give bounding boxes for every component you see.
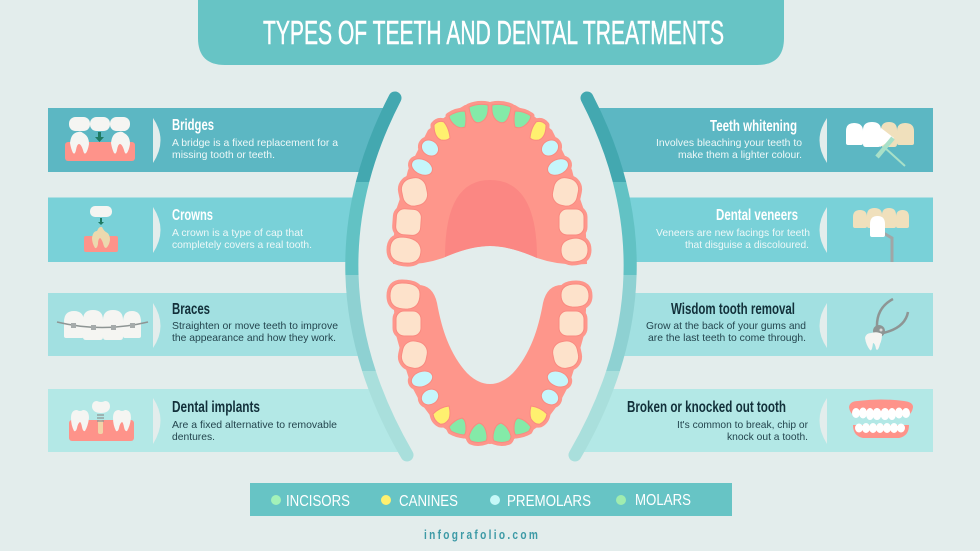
panel: dental veneers: [630, 198, 933, 262]
right arc: [575, 98, 630, 455]
footer website: infografolio.com: [424, 528, 538, 542]
panel: teeth whitening: [582, 108, 933, 172]
text block: It's common to break, chip or: [677, 419, 808, 431]
upper right tooth halo: [492, 104, 588, 262]
text block: [172, 320, 338, 344]
text block: [656, 137, 802, 161]
lower right tooth halo: [493, 284, 589, 442]
icon: braces: [57, 310, 148, 340]
text block: Straighten or move teeth to improve: [172, 320, 338, 332]
text block: the appearance and how they work.: [172, 332, 336, 344]
text block: knock out a tooth.: [727, 431, 808, 443]
text block: [677, 419, 808, 443]
panel: broken or knocked out tooth: [578, 389, 933, 452]
heading: Dental veneers: [716, 207, 798, 224]
heading: Wisdom tooth removal: [671, 301, 795, 318]
legend: molars: [616, 492, 691, 509]
text block: Veneers are new facings for teeth: [656, 227, 810, 239]
text block: missing tooth or teeth.: [172, 149, 275, 161]
text block: [646, 320, 806, 344]
text block: [172, 227, 312, 251]
text block: dentures.: [172, 431, 215, 443]
heading: Braces: [172, 301, 210, 318]
text block: [172, 419, 337, 443]
text block: [172, 137, 338, 161]
icon: whitening: [846, 122, 914, 166]
title banner: [198, 0, 784, 65]
text block: are the last teeth to come through.: [648, 332, 806, 344]
text block: [656, 227, 810, 251]
lower left tooth halo: [390, 283, 487, 442]
palate: [445, 180, 537, 258]
heading: Dental implants: [172, 399, 260, 416]
heading: Broken or knocked out tooth: [627, 399, 786, 416]
text block: A bridge is a fixed replacement for a: [172, 137, 338, 149]
panel: braces: [48, 293, 358, 356]
legend: incisors: [271, 493, 350, 510]
panel: crowns: [48, 198, 352, 262]
text block: Involves bleaching your teeth to: [656, 137, 802, 149]
text block: completely covers a real tooth.: [172, 239, 312, 251]
text block: that disguise a discoloured.: [685, 239, 809, 251]
lower teeth arch: [390, 283, 589, 444]
icon: bridge: [65, 117, 135, 161]
legend: canines: CANINES: [399, 493, 458, 510]
heading: Crowns: [172, 207, 213, 224]
upper gum: [393, 102, 587, 264]
lower gum: [394, 285, 586, 444]
lower left teeth: [390, 283, 487, 442]
legend: premolars: PREMOLARS: [507, 493, 591, 510]
heading: Bridges: [172, 117, 214, 134]
icon: forceps: [865, 299, 908, 350]
icon: veneers: [853, 208, 909, 262]
heading: Teeth whitening: [710, 118, 797, 135]
text block: A crown is a type of cap that: [172, 227, 303, 239]
icon: crown: [84, 206, 118, 252]
panel: wisdom tooth removal: [624, 293, 933, 356]
text block: Grow at the back of your gums and: [646, 320, 806, 332]
legend: incisors: INCISORS: [286, 493, 350, 510]
icon: implant: [69, 401, 134, 441]
text block: Are a fixed alternative to removable: [172, 419, 337, 431]
legend: molars: MOLARS: [635, 492, 691, 509]
panel: bridges: [48, 108, 398, 172]
panel: dental implants: [48, 389, 402, 452]
upper left teeth: [390, 104, 488, 263]
upper left tooth halo: [390, 104, 488, 263]
upper right teeth: [492, 104, 588, 262]
upper teeth arch: [390, 102, 588, 264]
text block: make them a lighter colour.: [678, 149, 802, 161]
lower right teeth: [493, 284, 589, 442]
icon: dentures: [849, 400, 913, 438]
left arc: [352, 98, 407, 455]
legend: canines: [381, 493, 458, 510]
legend bar: [250, 483, 732, 516]
title: TYPES OF TEETH AND DENTAL TREATMENTS: [263, 14, 724, 51]
